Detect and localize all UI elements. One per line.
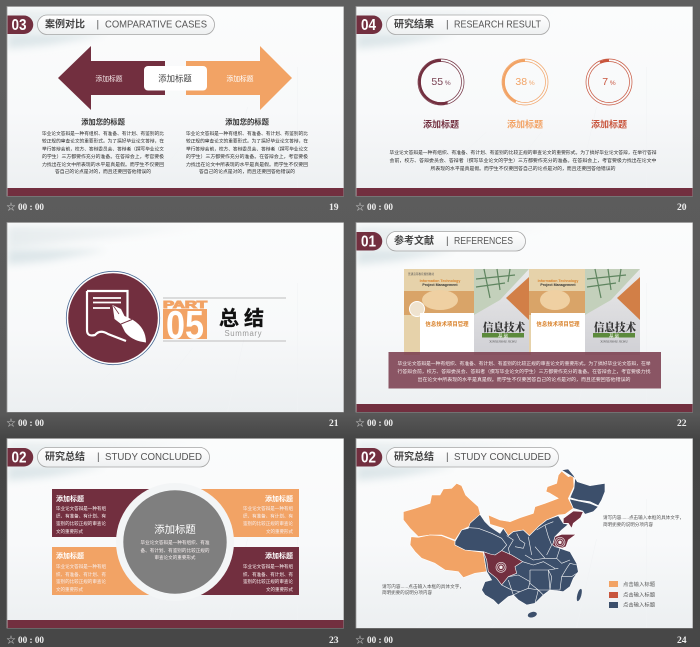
- text: top left: 织、有准备、有计划、有: [56, 512, 106, 520]
- text block: left column: 举行答辩会前，校方、答辩委员会、答辩者（撰写毕业论文: [42, 145, 164, 152]
- center circle: 备、有计划、有鉴别的比较正规的: [140, 547, 210, 554]
- text: bottom left: [56, 551, 106, 593]
- book cover 2: XINXIJISHU JICHU: [489, 340, 517, 344]
- heading: study concluded: 研究总结: [394, 450, 434, 463]
- text: bottom right: [243, 551, 293, 593]
- book cover 4: 信息技术: [594, 320, 637, 335]
- footer bar: [356, 188, 692, 196]
- text: top left: 文的重要形式: [56, 528, 83, 535]
- chart: 55% ring: 55 %: [431, 76, 451, 88]
- title: summary: Summary: [224, 329, 262, 338]
- footer: slide 19: ☆: [6, 202, 16, 212]
- text block: right column: 毕业论文答辩是一种有组织、有准备、有计划、有鉴别的比: [186, 130, 308, 137]
- heading: research result: |: [446, 20, 449, 30]
- legend: 点击输入标题: [623, 590, 656, 598]
- center circle: 毕业论文答辩是一种有组织、有准: [140, 539, 210, 546]
- text: bottom right: 鉴别的比较正规的审查论: [243, 578, 293, 585]
- title: summary: 结: [244, 307, 264, 330]
- section number badge: 04: [361, 17, 376, 34]
- footer: slide 23: ☆: [6, 635, 16, 645]
- book cover 3: 信息技术项目管理: [536, 320, 580, 328]
- text: top right: [243, 494, 293, 535]
- footer: slide 22: ☆: [356, 418, 365, 428]
- icon: pen and document: [66, 271, 160, 365]
- text: bottom left: 毕业论文答辩是一种有组: [56, 563, 106, 570]
- label: orange: 添加标题: [507, 118, 543, 130]
- heading: references: [386, 232, 526, 251]
- map of China: [403, 469, 605, 618]
- caption overlay: 毕业论文答辩是一种有组织、有准备、有计划、有鉴别的比较正规的审查论文的重要形式。为了搞好毕业论文答辩，在举: [398, 360, 651, 367]
- footer: slide 20: ☆: [356, 202, 365, 212]
- text block: 会前，校方、答辩委员会、答辩者（撰写毕业论文的学生）三方都要作充分的准备。在答辩会上，考官要极力找出在论文中: [390, 157, 657, 164]
- panel: slide 24 map: [356, 438, 692, 628]
- book cover 1: 信息技术项目管理: [425, 320, 469, 328]
- text block: right column: 的学生）三方都要作充分的准备。在答辩会上，考官要极: [186, 153, 308, 160]
- panel: slide 19 comparative cases: [7, 6, 344, 196]
- section number badge: [8, 16, 33, 34]
- chart: 7% ring: [586, 59, 632, 105]
- section number badge: 02: [12, 450, 27, 466]
- divider lines: [163, 298, 286, 341]
- footer: slide 19: 00 : 00: [18, 202, 44, 213]
- block: bottom left: [52, 547, 175, 595]
- footer: slide 24: 00 : 00: [367, 635, 393, 646]
- heading: references: REFERENCES: [454, 236, 513, 247]
- callout: right: [603, 514, 684, 528]
- legend: 点击输入标题: [623, 580, 656, 588]
- book cover 2: 信息技术: [483, 320, 526, 335]
- section number badge: 01: [361, 234, 376, 250]
- footer: slide 21: 00 : 00: [18, 418, 44, 429]
- footer: slide 19: 19: [329, 202, 339, 213]
- label: red: 添加标题: [591, 118, 627, 130]
- text: top left: 鉴别的比较正规的审查论: [56, 520, 106, 527]
- heading: study concluded: [386, 448, 558, 467]
- heading: study concluded: STUDY CONCLUDED: [454, 452, 551, 463]
- text block: left column: 力找出在论文中所表现的水平是真是假。而学生不仅要回: [42, 161, 164, 168]
- panel: slide 22 references: [356, 222, 692, 412]
- arrow: left maroon: 添加标题: [95, 74, 123, 83]
- panel: slide 23 study concluded: [7, 438, 344, 628]
- section number badge: [356, 232, 382, 250]
- chart: 55% ring: [418, 59, 464, 105]
- text block: 所表现的水平是真是假。而学生不仅要回答自己的论点是对的，而且还要回答他错误的: [430, 165, 616, 172]
- book cover 2: [474, 269, 529, 355]
- center label: [144, 66, 207, 90]
- heading: comparative cases: |: [96, 20, 99, 30]
- callout: right: 简明扼要的说明分项内容: [603, 521, 653, 528]
- text: top right: 文的重要形式: [266, 528, 293, 535]
- text block: left column: 的学生）三方都要作充分的准备。在答辩会上，考官要极: [42, 153, 164, 160]
- label: maroon: 添加标题: [423, 118, 459, 130]
- footer: slide 21: ☆: [6, 418, 16, 428]
- book cover 1: [404, 269, 474, 355]
- heading: study concluded: 研究总结: [45, 450, 85, 463]
- book cover 3: Information Technology: [538, 279, 578, 283]
- footer bar: [8, 188, 344, 196]
- text: bottom right: 毕业论文答辩是一种有组: [243, 563, 293, 570]
- heading: comparative cases: [38, 15, 214, 34]
- chart: 38% ring: 38 %: [515, 76, 535, 88]
- section number badge: 02: [361, 450, 376, 466]
- text block: 毕业论文答辩是一种有组织、有准备、有计划、有鉴别的比较正规的审查论文的重要形式。为了搞好毕业论文答辩，在举行答辩: [390, 149, 657, 156]
- text: top left: [56, 494, 106, 535]
- footer: slide 20: 20: [677, 202, 687, 213]
- footer: slide 22: [356, 418, 687, 429]
- footer: slide 23: [6, 635, 339, 646]
- part 05 tag: PART: [163, 300, 207, 311]
- section number badge: [356, 16, 382, 34]
- heading: study concluded: [38, 448, 210, 467]
- text: bottom right: 织、有准备、有计划、有: [243, 571, 293, 578]
- heading: research result: RESEARCH RESULT: [454, 20, 541, 30]
- text block: [390, 149, 657, 172]
- section number badge: [8, 448, 33, 466]
- footer: slide 21: 21: [329, 418, 339, 429]
- block: bottom right: [175, 547, 299, 595]
- footer: slide 23: 00 : 00: [18, 635, 44, 646]
- arrow: right orange: 添加标题: [226, 74, 254, 83]
- chart: 38% ring: [502, 59, 548, 105]
- book cover 4: [585, 269, 640, 355]
- heading: research result: [386, 15, 550, 34]
- heading: study concluded: STUDY CONCLUDED: [105, 452, 202, 463]
- heading: study concluded: |: [97, 452, 100, 463]
- section number badge: [356, 448, 382, 466]
- footer bar: [8, 620, 344, 628]
- book cover 3: Project Management: [540, 283, 576, 287]
- book cover 4: 基 础: [609, 332, 620, 339]
- callout: left: 请写内容......点击输入本框的具体文字，: [382, 583, 464, 590]
- text: top left: 添加标题: [56, 494, 84, 503]
- text: top right: 毕业论文答辩是一种有组: [243, 505, 293, 512]
- heading: study concluded: |: [446, 452, 449, 463]
- text block: right column: 举行答辩会前，校方、答辩委员会、答辩者（撰写毕业论文: [186, 145, 308, 152]
- book cover 3: [529, 269, 585, 355]
- footer: slide 20: 00 : 00: [367, 202, 393, 213]
- footer: slide 21: [6, 418, 339, 429]
- title: summary: [219, 307, 264, 338]
- arrow: right orange: [186, 46, 292, 110]
- text block: left column: 较正规的审查论文的重要形式。为了搞好毕业论文答辩，在: [42, 138, 164, 145]
- book cover 1: Project Management: [422, 283, 458, 287]
- heading: references: |: [446, 236, 449, 247]
- text block: right column: [186, 118, 308, 175]
- section number badge: 03: [12, 17, 27, 34]
- footer: slide 22: 00 : 00: [367, 418, 393, 429]
- panel: slide 21 part 05 summary: [7, 222, 344, 412]
- text: bottom right: 文的重要形式: [266, 586, 293, 593]
- caption overlay: [388, 352, 661, 388]
- footer: slide 24: 24: [677, 635, 687, 646]
- text block: left column: 添加您的标题: [81, 118, 126, 126]
- arrow: left maroon: [58, 46, 165, 110]
- footer: slide 24: [356, 635, 687, 646]
- text: bottom right: 添加标题: [265, 551, 293, 560]
- text block: right column: 答自己的论点是对的，而且还要回答他错误的: [199, 168, 295, 175]
- footer: slide 22: 22: [677, 418, 687, 429]
- caption overlay: 出在论文中所表现的水平是真是假。而学生不仅要回答自己的论点是对的，而且还要回答他错误的: [418, 376, 631, 383]
- footer bar: [356, 404, 692, 412]
- legend: 点击输入标题: [623, 600, 656, 608]
- book cover 2: 基 础: [498, 332, 509, 339]
- footer: slide 20: [356, 202, 687, 213]
- heading: research result: 研究结果: [394, 18, 434, 30]
- text block: left column: 毕业论文答辩是一种有组织、有准备、有计划、有鉴别的比: [42, 130, 164, 137]
- text: top left: 毕业论文答辩是一种有组: [56, 505, 106, 512]
- center label: 添加标题: [158, 74, 192, 84]
- heading: references: 参考文献: [394, 234, 434, 247]
- center circle: 添加标题: [154, 523, 196, 536]
- callout: left: [382, 583, 464, 596]
- book cover 1: 普通高等教育规划教材: [408, 272, 434, 276]
- text: top right: 织、有准备、有计划、有: [243, 512, 293, 520]
- book cover 1: Information Technology: [420, 279, 460, 283]
- text: bottom left: 织、有准备、有计划、有: [56, 571, 106, 578]
- text block: left column: [42, 118, 164, 175]
- block: top left: [52, 489, 175, 537]
- book cover 4: XINXIJISHU JICHU: [600, 340, 628, 344]
- chart: 7% ring: 7 %: [602, 76, 616, 88]
- text block: left column: 答自己的论点是对的，而且还要回答他错误的: [55, 168, 151, 175]
- text: top right: 鉴别的比较正规的审查论: [243, 520, 293, 527]
- text: bottom left: 鉴别的比较正规的审查论: [56, 578, 106, 585]
- text: bottom left: 添加标题: [56, 551, 84, 560]
- heading: comparative cases: 案例对比: [45, 18, 85, 30]
- text block: right column: 力找出在论文中所表现的水平是真是假。而学生不仅要回: [186, 161, 308, 168]
- callout: right: 请写内容......点击输入本框的具体文字，: [603, 514, 684, 521]
- center circle: 审查论文的重要形式: [154, 554, 196, 561]
- title: summary: 总: [219, 307, 239, 330]
- block: top right: [175, 489, 299, 537]
- text block: right column: 较正规的审查论文的重要形式。为了搞好毕业论文答辩，在: [186, 138, 308, 145]
- part 05 tag: 05: [166, 304, 204, 348]
- center circle: [116, 483, 234, 601]
- panel: slide 20 research result: [356, 6, 692, 196]
- footer: slide 19: [6, 202, 339, 213]
- heading: comparative cases: COMPARATIVE CASES: [105, 20, 207, 30]
- text: top right: 添加标题: [265, 494, 293, 503]
- footer: slide 23: 23: [329, 635, 339, 646]
- caption overlay: 行答辩会前，校方、答辩委员会、答辩者（撰写毕业论文的学生）三方都要作充分的准备。在答辩会上，考官要极力找: [398, 368, 651, 375]
- legend: [609, 580, 656, 608]
- footer: slide 24: ☆: [356, 635, 365, 645]
- callout: left: 简明扼要的说明分项内容: [382, 589, 432, 596]
- text: bottom left: 文的重要形式: [56, 586, 83, 593]
- text block: right column: 添加您的标题: [225, 118, 270, 126]
